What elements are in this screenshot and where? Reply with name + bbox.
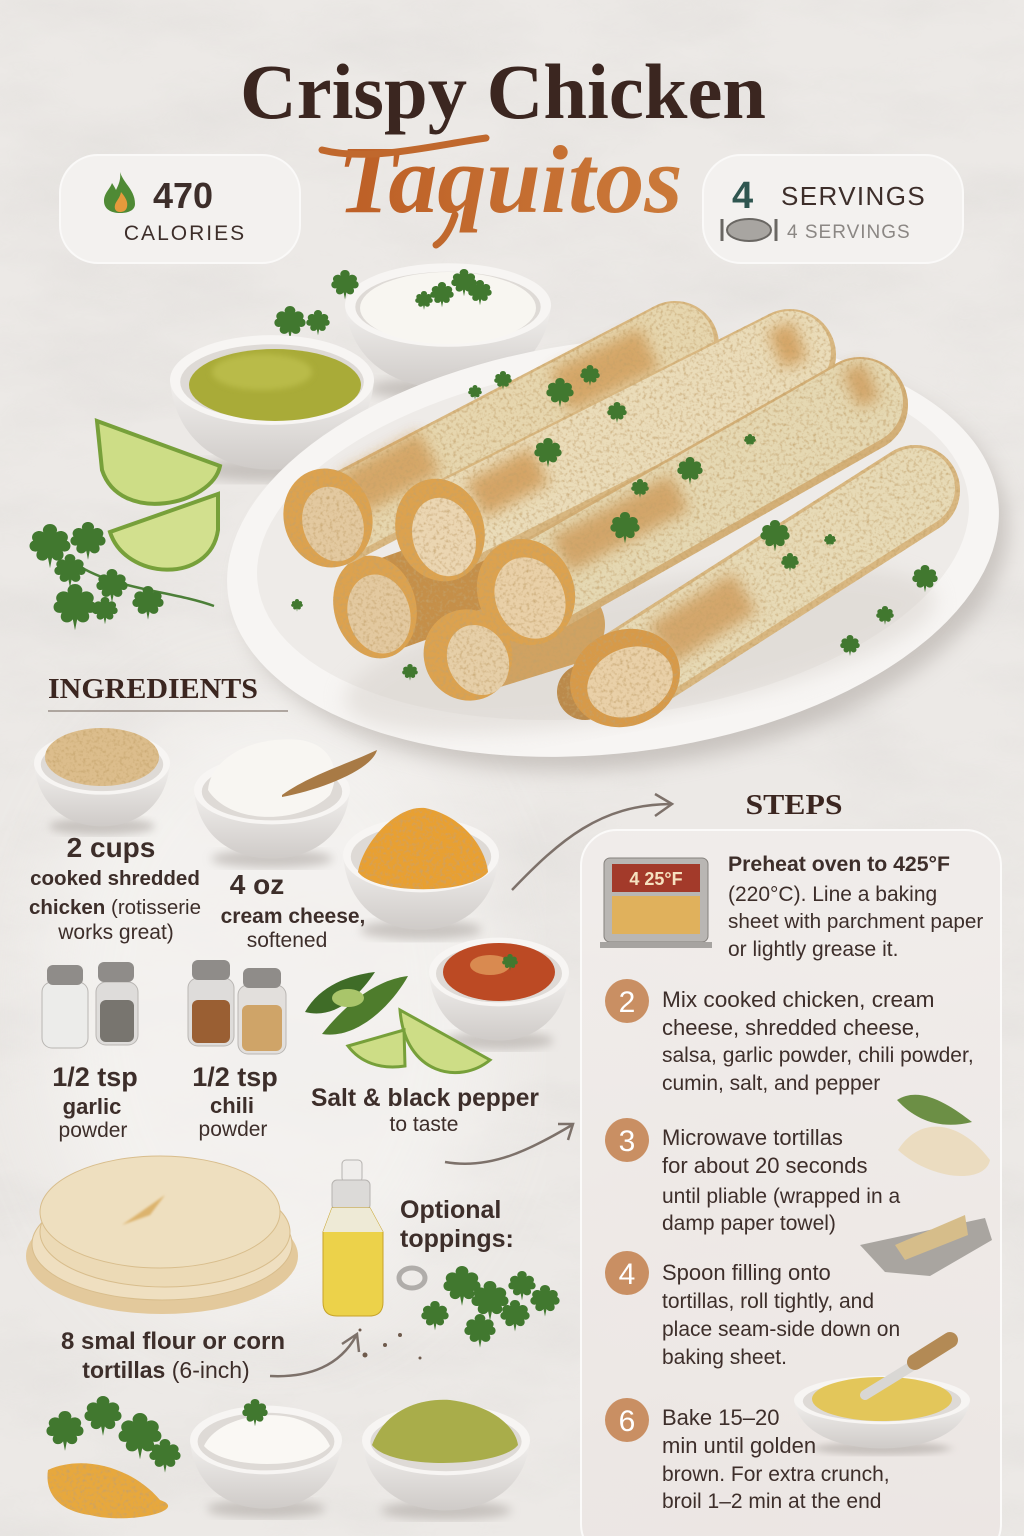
ingredient: oil spray bottle (323, 1160, 383, 1316)
step 4: Spoon filling onto (662, 1260, 831, 1285)
step 4: 4 (619, 1258, 635, 1291)
lime wedges (97, 421, 220, 570)
step 1 (600, 852, 983, 961)
taquito 4 (555, 488, 915, 743)
plate with taquitos (203, 295, 1024, 812)
step 3: Microwave tortillas (662, 1125, 843, 1150)
step 2: Mix cooked chicken, cream (662, 987, 934, 1012)
badge: servings: 4 (732, 175, 753, 217)
step 3 (605, 1118, 990, 1235)
title: Crispy Chicken (240, 48, 766, 135)
ingredient: chicken: cooked shredded (30, 867, 200, 890)
ingredient: chicken: 2 cups (67, 832, 155, 863)
step 1: Preheat oven to 425°F (728, 852, 950, 876)
step 2: cheese, shredded cheese, (662, 1015, 920, 1040)
step 1: or lightly grease it. (728, 938, 898, 961)
step 6: broil 1–2 min at the end (662, 1490, 881, 1513)
ingredient: garlic powder: garlic (63, 1094, 121, 1119)
badge: calories: 470 (153, 175, 213, 216)
toppings row: herbs and cheese (46, 1396, 181, 1518)
arrows (270, 794, 672, 1376)
ingredient: garlic powder: powder (59, 1119, 127, 1142)
ingredient: chicken: chicken (rotisserie (29, 896, 201, 919)
ingredient: chili powder: powder (199, 1118, 267, 1141)
optional toppings: Optional (400, 1196, 501, 1224)
ingredient: tortillas (26, 1156, 298, 1383)
ingredient: salt and pepper label: to taste (390, 1113, 458, 1136)
badge: servings: 4 SERVINGS (787, 222, 911, 243)
step 3: until pliable (wrapped in a (662, 1185, 900, 1208)
optional toppings (358, 1196, 560, 1360)
ingredient: cream cheese: softened (247, 929, 327, 952)
step 3: damp paper towel) (662, 1212, 836, 1235)
guacamole bowl (170, 335, 374, 482)
lower taquitos (322, 546, 640, 715)
icon: plate (722, 219, 776, 241)
ingredient: shredded cheese (343, 808, 499, 940)
step 2: cumin, salt, and pepper (662, 1072, 880, 1095)
ingredient: salt and pepper label: Salt & black pepper (311, 1084, 539, 1112)
heading: steps: STEPS (746, 790, 842, 821)
badge: servings: SERVINGS (781, 181, 926, 211)
ingredient: cream cheese (194, 739, 377, 952)
cilantro (421, 1266, 560, 1348)
ingredient: garlic powder (42, 962, 138, 1142)
step 6: brown. For extra crunch, (662, 1463, 890, 1486)
step 3: 3 (619, 1125, 635, 1158)
taquito 1 (271, 342, 675, 579)
icon: flame (104, 172, 135, 213)
badge: servings (703, 155, 963, 263)
ingredient: chili powder (188, 960, 286, 1141)
ingredient: chicken: works great) (57, 921, 174, 944)
icon: oven (600, 858, 712, 948)
title script word: Taquitos (338, 126, 682, 233)
ingredient: salsa (429, 938, 569, 1050)
step 3: for about 20 seconds (662, 1153, 867, 1178)
step 2: 2 (619, 986, 635, 1019)
ingredient: salt and pepper label (311, 1084, 539, 1136)
step 6 (605, 1398, 890, 1513)
ingredient: chili powder: 1/2 tsp (192, 1062, 278, 1092)
toppings row: sour cream (190, 1399, 342, 1518)
step 4: place seam-side down on (662, 1318, 900, 1341)
step 6: Bake 15–20 (662, 1405, 779, 1430)
badge: calories (60, 155, 300, 263)
ingredient: tortillas: 8 smal flour or corn (61, 1328, 285, 1355)
icon: oven: 4 25°F (629, 869, 683, 889)
heading: ingredients: INGREDIENTS (48, 674, 258, 705)
ingredient: tortillas: tortillas (6-inch) (82, 1357, 250, 1383)
optional toppings: toppings: (400, 1225, 514, 1253)
step 2: salsa, garlic powder, chili powder, (662, 1044, 974, 1067)
herbs on taquitos (291, 365, 938, 681)
title (240, 48, 766, 245)
step 4: baking sheet. (662, 1346, 787, 1369)
jalapeno and lime (305, 972, 490, 1073)
step 6: 6 (619, 1405, 635, 1438)
ingredient: cream cheese: cream cheese, (221, 905, 365, 928)
toppings row: guacamole (362, 1400, 530, 1520)
ingredient: chili powder: chili (210, 1093, 254, 1118)
step 2 (605, 979, 974, 1125)
step 6: min until golden (662, 1433, 816, 1458)
taquito 3 (460, 380, 872, 661)
step 1: sheet with parchment paper (728, 910, 983, 933)
panel: steps (581, 830, 1001, 1536)
step 1: (220°C). Line a baking (728, 883, 937, 906)
ingredient: cream cheese: 4 oz (230, 869, 284, 900)
step 4: tortillas, roll tightly, and (662, 1290, 874, 1313)
ingredient: chicken (29, 728, 201, 944)
badge: calories: CALORIES (124, 222, 246, 245)
step 4 (605, 1215, 992, 1455)
sour cream bowl (274, 263, 551, 400)
ingredient: garlic powder: 1/2 tsp (52, 1062, 138, 1092)
cilantro sprig (30, 522, 214, 630)
taquito 2 (382, 340, 800, 593)
